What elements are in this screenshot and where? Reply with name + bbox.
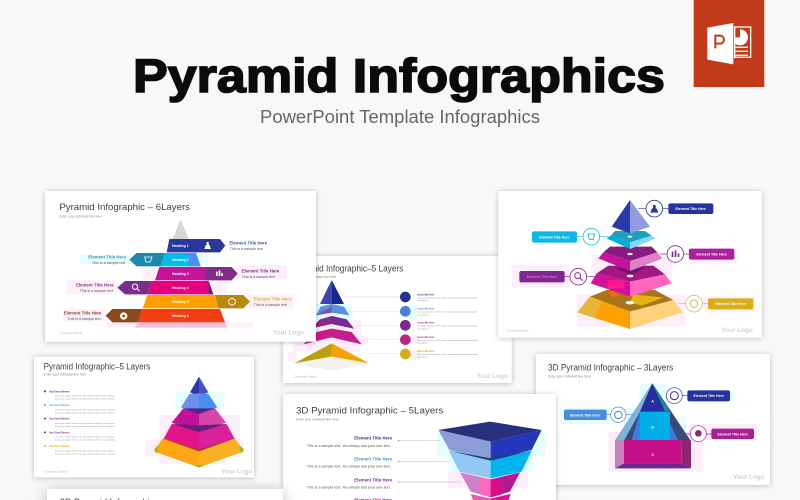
layer 5: gold base: [577, 290, 683, 329]
title: Pyramid Infographics: [133, 49, 665, 102]
list text: text appears: [417, 299, 428, 302]
panel: slide pyramid 6 layers: [45, 191, 316, 342]
list text: text appears: [417, 356, 428, 359]
bullet list: Key Event Review: [49, 390, 69, 393]
cyan halos: [295, 304, 417, 320]
logo: Your Logo: [733, 474, 765, 481]
bullet list: Insert your sample text here to add relevant content in your template: [55, 408, 116, 411]
layer 1: Heading 1: [172, 244, 189, 248]
label 1: [229, 241, 268, 251]
bullet list: Key Event Review: [49, 418, 69, 421]
callout: top: Element Title Here: [693, 394, 724, 398]
panel: partially visible bottom slide: [47, 489, 283, 500]
list text: [417, 293, 478, 359]
panel: slide 3D funnel pyramid: [283, 394, 556, 500]
callout: left pink: [519, 268, 595, 285]
label 5: This is a sample text: [254, 303, 287, 307]
heading: 3D Pyramid Infographic – 5Layers: [296, 405, 444, 415]
bullet list: Insert your sample text here to add relevant content in your template: [55, 411, 116, 414]
panel: slide 3D stacked pyramid: [498, 191, 762, 338]
label 2: Element Title Here: [354, 456, 393, 461]
label 1: Element Title Here: [354, 436, 393, 441]
logo: Your Logo: [273, 330, 304, 337]
callout: top: [666, 388, 730, 404]
list text: Insert title here: [417, 350, 435, 353]
layer 1: [167, 239, 225, 252]
subheading: Enter your subhead line here: [296, 418, 339, 422]
bullet list: Insert your sample text here to add relevant content in your template: [55, 395, 116, 398]
pyramid: [294, 280, 369, 371]
bullet list: Insert your sample text here to add relevant content in your template: [55, 449, 116, 452]
list text: Insert your text here, write a short sample text about your description: [417, 339, 478, 342]
bullet list: Insert your sample text here to add relevant content in your template: [55, 452, 116, 455]
pyramid base: [134, 322, 227, 328]
footer: Company Details: [60, 331, 83, 335]
stacked pyramid: [577, 200, 683, 329]
pink halo: [448, 472, 528, 488]
icon circles: [400, 292, 411, 359]
list text: Insert your text here, write a short sample text about your description: [417, 311, 478, 314]
layer 4: [117, 281, 213, 294]
callout: left cyan: Element Title Here: [539, 235, 570, 239]
label 1: [307, 436, 440, 448]
label 2: This is a sample text. You simply add your own text .: [307, 465, 392, 469]
label 2: [307, 456, 450, 469]
layer 6: Heading 6: [172, 314, 189, 318]
label 6: [64, 311, 102, 321]
label 1: This is a sample text. You simply add your own text .: [307, 444, 392, 448]
bullet list: Insert your sample text here to add relevant content in your template: [55, 436, 116, 439]
label 3: Element Title Here: [354, 477, 393, 482]
bullet list: Key Event Review: [49, 404, 69, 407]
3-layer pyramid: [615, 383, 691, 468]
halos: [145, 415, 244, 464]
icon: PowerPoint logo: [694, 0, 764, 87]
layer 2: Heading 2: [172, 258, 189, 262]
footer: Company Details: [44, 469, 68, 473]
pink halos: [608, 424, 757, 472]
inverted pyramid: [438, 422, 542, 500]
layer 4: [591, 266, 672, 297]
label 4: [76, 283, 114, 293]
list text: Insert your text here, write a short sample text about your description: [417, 325, 478, 328]
bullet list: [44, 390, 116, 455]
logo: Your Logo: [477, 373, 508, 380]
label 4: This is a sample text: [80, 289, 113, 293]
halos: [288, 320, 420, 362]
list text: text appears: [417, 313, 428, 316]
layer 5: [143, 295, 250, 308]
slide card: [45, 191, 316, 342]
3D pyramid: [154, 377, 244, 468]
bullet list: Insert your sample text here to add relevant content in your template: [55, 422, 116, 425]
panel: slide list with 3D pyramid: [34, 357, 254, 477]
callout: left: [564, 407, 633, 422]
logo: Your Logo: [722, 327, 753, 334]
list text: text appears: [417, 327, 428, 330]
panel: slide 3D pyramid 3 layers: [536, 354, 770, 485]
label 3: This is a sample text. You simply add your own text .: [307, 485, 392, 489]
subheading: Enter your subhead line here: [293, 275, 336, 279]
callout: top: [638, 200, 713, 217]
list text: Insert title here: [417, 322, 435, 325]
cyan halo: [176, 392, 224, 409]
3-layer pyramid: B: [651, 425, 654, 429]
label 6: This is a sample text: [67, 317, 101, 321]
layer 1: apex: [612, 200, 650, 233]
callout: right gold: Element Title Here: [715, 302, 746, 306]
layer 2: [607, 231, 656, 249]
heading: Pyramid Infographic – 6Layers: [59, 202, 191, 212]
footer: Company Details: [294, 374, 317, 378]
cyan halos: [80, 255, 208, 265]
slide card: [536, 354, 770, 485]
label 5: Element Title Here: [254, 297, 292, 302]
layer 4: Heading 4: [172, 286, 189, 290]
label 3: [307, 477, 462, 489]
list text: Insert title here: [417, 308, 435, 311]
callout: left pink: Element Title Here: [527, 275, 557, 279]
list text: Insert title here: [417, 293, 435, 296]
callout: right: [687, 426, 754, 442]
label 3: Element Title Here: [242, 269, 280, 274]
layer 3: [598, 247, 662, 271]
layer 5: Heading 5: [172, 300, 189, 304]
3-layer pyramid: A: [651, 400, 654, 404]
bullet list: Insert your sample text here to add relevant content in your template: [55, 398, 116, 401]
list text: Insert title here: [417, 336, 435, 339]
bullet list: Key Event Review: [49, 431, 69, 434]
leader lines: [344, 297, 400, 354]
label 4: Element Title Here: [76, 283, 114, 288]
slide card: [283, 394, 556, 500]
halos: [512, 248, 755, 327]
gray apex: [173, 219, 189, 239]
heading: 3D Pyramid Infographic – 3Layers: [548, 363, 674, 373]
callout: right gold: [678, 295, 753, 312]
slide card: [283, 256, 512, 383]
layer 2: [129, 253, 201, 266]
slide card: [498, 191, 762, 338]
panel: slide 5 layers list pyramid: [283, 256, 512, 383]
list text: Insert your text here, write a short sample text about your description: [417, 353, 478, 356]
list text: Insert your text here, write a short sample text about your description: [417, 296, 478, 299]
heading: Pyramid Infographic–5 Layers: [293, 264, 404, 274]
layer 6: [106, 309, 225, 322]
slide card: [34, 357, 254, 477]
label 1: This is a sample text: [230, 247, 263, 251]
label 2: This is a sample text: [92, 261, 125, 265]
heading: Pyramid Infographic–5 Layers: [44, 361, 151, 371]
callout: top: Element Title Here: [675, 207, 706, 211]
slide card: [47, 489, 283, 500]
subheading: Enter your subhead line here: [44, 373, 87, 377]
callout: right purple: [660, 246, 734, 262]
bullet list: Insert your sample text here to add relevant content in your template: [55, 439, 116, 442]
callout: left cyan: [532, 228, 608, 245]
subheading: Enter your subhead line here: [59, 214, 102, 218]
bullet list: Insert your sample text here to add relevant content in your template: [55, 425, 116, 428]
bullet list: Key Event Review: [49, 445, 69, 448]
callout: left: Element Title Here: [570, 413, 600, 417]
callout: right purple: Element Title Here: [696, 253, 727, 257]
callout: right: Element Title Here: [717, 432, 748, 436]
pink halos: [63, 265, 293, 328]
label 5: [254, 297, 292, 307]
label 3: This is a sample text: [242, 275, 275, 279]
label 6: Element Title Here: [64, 311, 102, 316]
layer 3: [155, 267, 238, 280]
label 2: Element Title Here: [88, 255, 127, 260]
logo: Your Logo: [221, 468, 253, 475]
layer 3: Heading 3: [172, 272, 189, 276]
subtitle: PowerPoint Template Infographics: [260, 107, 540, 127]
halos: [437, 433, 545, 472]
list text: text appears: [417, 342, 428, 345]
3-layer pyramid: C: [651, 453, 654, 457]
label 3: [242, 269, 280, 279]
label 2: [88, 255, 127, 265]
cyan halos: [560, 383, 735, 440]
footer: Company Details: [506, 328, 529, 332]
label 1: Element Title Here: [229, 241, 268, 246]
subheading: Enter your subhead line here: [548, 374, 591, 378]
